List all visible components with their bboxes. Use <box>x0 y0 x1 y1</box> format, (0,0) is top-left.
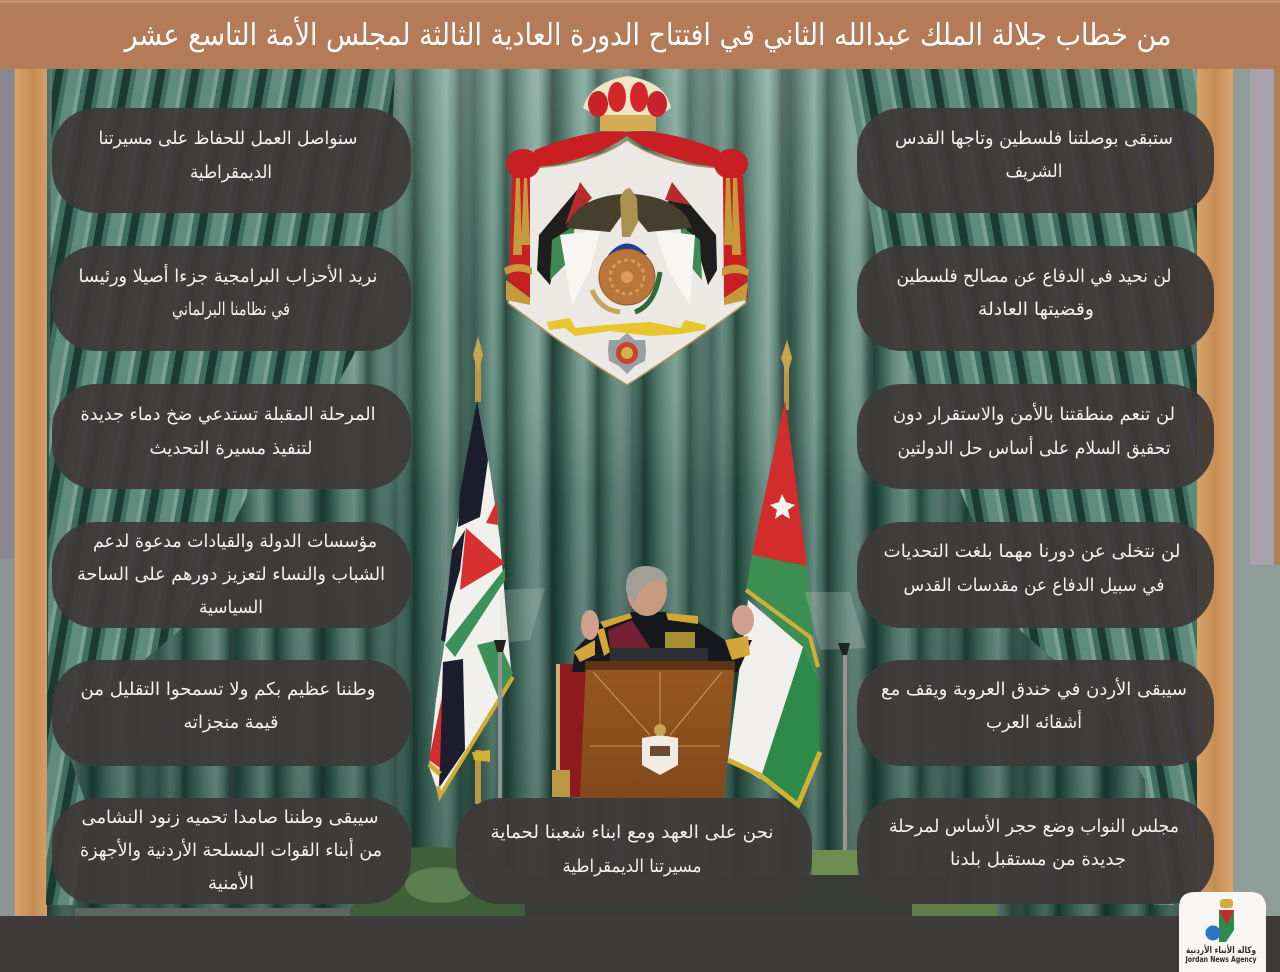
right flag with pole <box>728 340 820 807</box>
podium emblem <box>642 724 678 775</box>
hands <box>581 605 754 640</box>
quote text: لن نتخلى عن دورنا مهما بلغت التحديات <box>884 541 1180 562</box>
quote text <box>80 807 382 894</box>
quote text <box>884 541 1180 596</box>
quote pill: left 1 <box>52 108 411 213</box>
quote text <box>889 815 1179 870</box>
quote pill: right 3 <box>857 384 1214 489</box>
quote text: سيبقى وطننا صامدا تحميه زنود النشامى <box>82 807 378 828</box>
quote pill: right 1 <box>857 108 1214 213</box>
quote text: سيبقى الأردن في خندق العروبة ويقف مع <box>881 678 1187 700</box>
quote pill: left 6 <box>52 798 411 904</box>
quote text <box>80 404 376 459</box>
logo globe <box>1206 926 1220 940</box>
quote text: جديدة من مستقبل بلدنا <box>950 849 1126 870</box>
quote pill: centre <box>456 798 812 904</box>
podium <box>580 648 735 798</box>
gold epaulettes <box>574 613 750 662</box>
flags behind eagle <box>537 182 717 305</box>
quote text <box>881 678 1187 733</box>
gold tassels <box>504 178 749 305</box>
quote text <box>77 531 385 618</box>
quote text <box>98 128 358 183</box>
quote text: في نظامنا البرلماني <box>172 299 290 320</box>
red sash <box>608 620 650 650</box>
quote text: الشريف <box>1006 161 1062 182</box>
quote text: الأمنية <box>208 872 254 894</box>
bottom band <box>0 916 1280 972</box>
chair <box>552 664 588 797</box>
quote pill: right 4 <box>857 522 1214 628</box>
quote text: لن تنعم منطقتنا بالأمن والاستقرار دون <box>893 403 1175 425</box>
coat of arms <box>504 76 749 385</box>
header band <box>0 0 1280 69</box>
quote pill: left 4 <box>52 522 411 628</box>
head <box>626 566 668 616</box>
left flag with pole <box>429 336 513 804</box>
logo wordmark <box>1185 944 1257 964</box>
wooden frame right <box>1197 69 1233 919</box>
logo wordmark: وكالة الأنباء الأردنية <box>1186 944 1256 956</box>
quote text <box>896 266 1172 320</box>
quote text: نريد الأحزاب البرامجية جزءا أصيلا ورئيسا <box>78 264 378 287</box>
quote pill: left 3 <box>52 384 411 489</box>
wooden frame left <box>15 69 52 919</box>
quote text: المرحلة المقبلة تستدعي ضخ دماء جديدة <box>80 404 376 425</box>
shield <box>508 140 746 385</box>
quote pill: right 5 <box>857 660 1214 766</box>
left tied drape <box>46 69 395 905</box>
logo flag and crown <box>1219 899 1234 942</box>
quote pill: left 5 <box>52 660 411 766</box>
quote text: ستبقى بوصلتنا فلسطين وتاجها القدس <box>895 128 1173 149</box>
red mantle <box>506 131 748 300</box>
quote text: من أبناء القوات المسلحة الأردنية والأجهزة <box>80 838 382 861</box>
quote text: تحقيق السلام على أساس حل الدولتين <box>898 436 1170 459</box>
quote text: قيمة منجزاته <box>184 712 278 733</box>
quote text: في سبيل الدفاع عن مقدسات القدس <box>904 575 1164 596</box>
King addressing parliament <box>572 566 754 672</box>
uniform <box>572 612 752 672</box>
quote text: أشقائه العرب <box>986 710 1082 733</box>
side wall left <box>0 69 15 919</box>
quote text: لتنفيذ مسيرة التحديث <box>150 438 312 459</box>
quote text: وطننا عظيم بكم ولا تسمحوا التقليل من <box>80 679 376 700</box>
pleated curtain <box>47 69 1197 916</box>
medallion <box>592 244 660 312</box>
stage steps and foliage <box>75 847 997 917</box>
quote text: لن نحيد في الدفاع عن مصالح فلسطين <box>896 266 1172 287</box>
crown <box>583 76 671 131</box>
quote text: الديمقراطية <box>190 162 272 183</box>
side wall right <box>1233 69 1280 919</box>
quote text <box>895 128 1173 182</box>
microphone stands and glass panes <box>494 588 866 850</box>
quote text: مجلس النواب وضع حجر الأساس لمرحلة <box>889 815 1179 837</box>
yellow ribbon <box>547 318 706 336</box>
quote text: وقضيتها العادلة <box>978 299 1094 320</box>
quote pill: right 2 <box>857 246 1214 351</box>
eagle <box>566 188 692 237</box>
order star <box>608 333 646 374</box>
logo wordmark: Jordan News Agency <box>1185 955 1257 964</box>
quote text: السياسية <box>199 597 263 618</box>
logo: Jordan News Agency <box>1179 892 1266 972</box>
quote text: الشباب والنساء لتعزيز دورهم على الساحة <box>77 564 385 585</box>
quote text <box>490 822 774 877</box>
quote text: نحن على العهد ومع ابناء شعبنا لحماية <box>490 822 774 843</box>
right tied drape <box>845 69 1197 905</box>
quote text <box>893 403 1175 459</box>
quote text: مؤسسات الدولة والقيادات مدعوة لدعم <box>93 531 377 552</box>
quote text: سنواصل العمل للحفاظ على مسيرتنا <box>98 128 358 149</box>
quote text <box>80 679 376 733</box>
quote text <box>78 264 378 320</box>
quote pill: right 6 <box>857 798 1214 904</box>
quote text: مسيرتنا الديمقراطية <box>562 856 702 877</box>
title: من خطاب جلالة الملك عبدالله الثاني في افتتاح الدورة العادية الثالثة لمجلس الأمة التاسع عشر <box>123 15 1171 53</box>
quote pill: left 2 <box>52 246 411 351</box>
